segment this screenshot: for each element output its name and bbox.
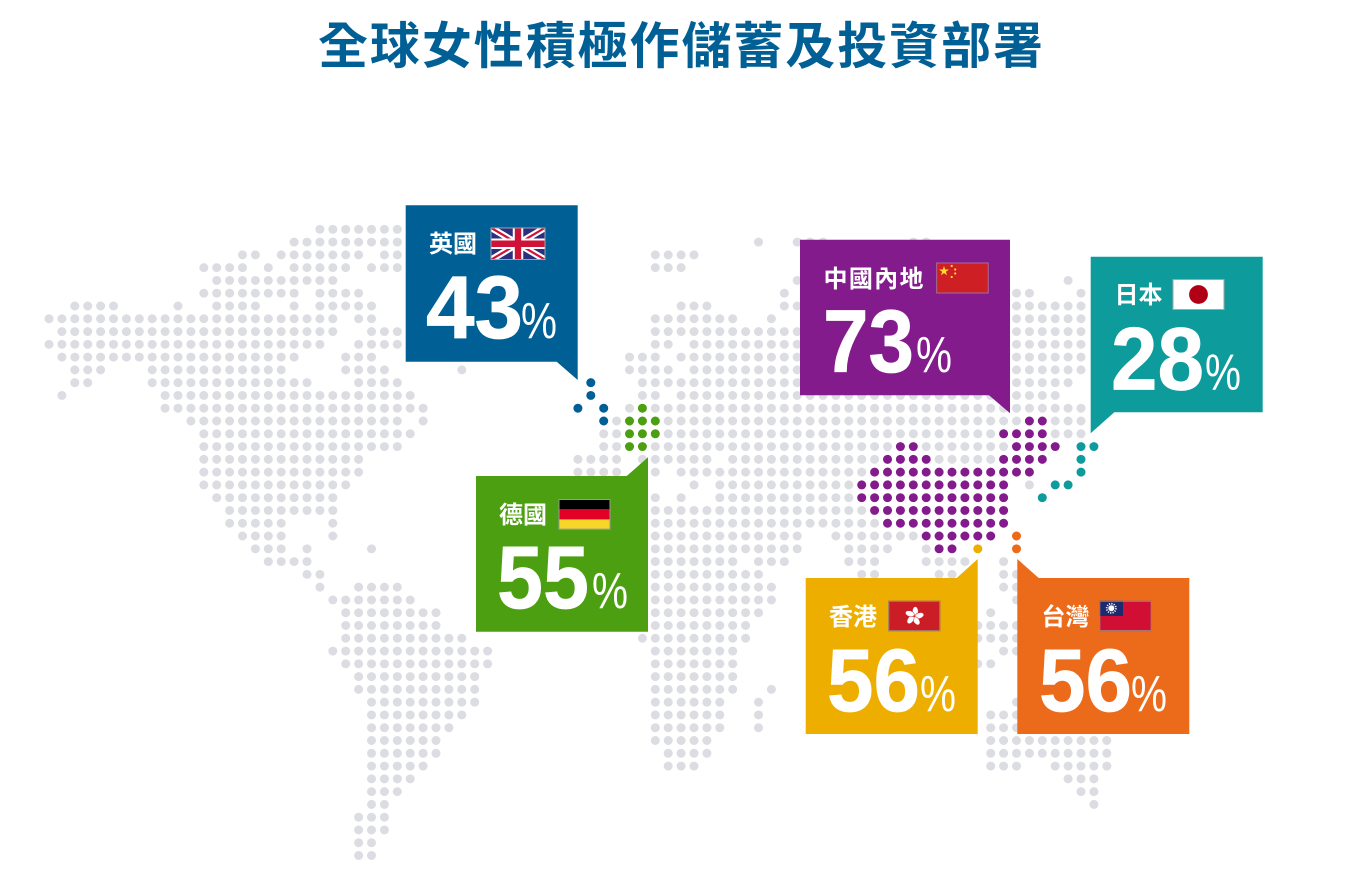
panel: Japan callout: % bbox=[1205, 344, 1241, 400]
highlighted dots: Taiwan bbox=[1016, 536, 1018, 549]
panel: Germany callout bbox=[476, 457, 648, 632]
panel: Japan callout bbox=[1091, 257, 1263, 433]
panel: Hong Kong callout bbox=[806, 559, 978, 734]
icon: Taiwan flag bbox=[1099, 601, 1152, 631]
panel: mainland China callout bbox=[800, 240, 1010, 413]
panel: Taiwan callout: 台灣 bbox=[1042, 603, 1090, 631]
panel: Japan callout: 28 bbox=[1111, 308, 1204, 408]
panel: Taiwan callout: 56 bbox=[1039, 630, 1132, 730]
panel: mainland China callout: 73 bbox=[823, 291, 914, 391]
icon: UK flag bbox=[490, 228, 546, 260]
panel: UK callout: 英國 bbox=[429, 231, 477, 258]
panel: UK callout: % bbox=[521, 292, 557, 349]
highlighted dots: Japan bbox=[1042, 447, 1094, 498]
panel: Hong Kong callout: 56 bbox=[827, 630, 920, 730]
panel: Taiwan callout bbox=[1017, 559, 1189, 734]
panel: Hong Kong callout: 香港 bbox=[829, 604, 877, 631]
panel: Taiwan callout: % bbox=[1131, 665, 1167, 722]
panel: Germany callout: 55 bbox=[497, 527, 589, 627]
highlighted dots: UK bbox=[578, 383, 604, 421]
panel: UK callout: 43 bbox=[426, 257, 523, 357]
icon: Japan flag bbox=[1172, 279, 1224, 310]
icon: Germany flag bbox=[558, 499, 610, 530]
title: 全球女性積極作儲蓄及投資部署 bbox=[318, 18, 1043, 74]
highlighted dot: Hong Kong bbox=[977, 548, 979, 550]
panel: mainland China callout: % bbox=[916, 326, 952, 383]
panel: Japan callout: 日本 bbox=[1114, 282, 1162, 309]
panel: UK callout bbox=[406, 205, 578, 380]
world dot map bbox=[49, 229, 1107, 856]
icon: Hong Kong flag bbox=[888, 601, 940, 631]
icon: China flag bbox=[936, 262, 989, 294]
panel: mainland China callout: 中國內地 bbox=[824, 266, 924, 293]
panel: Germany callout: % bbox=[592, 562, 628, 619]
highlighted dots: mainland China bbox=[862, 421, 1055, 549]
panel: Germany callout: 德國 bbox=[499, 502, 547, 529]
highlighted dots: Germany bbox=[630, 408, 655, 447]
panel: Hong Kong callout: % bbox=[920, 665, 956, 722]
